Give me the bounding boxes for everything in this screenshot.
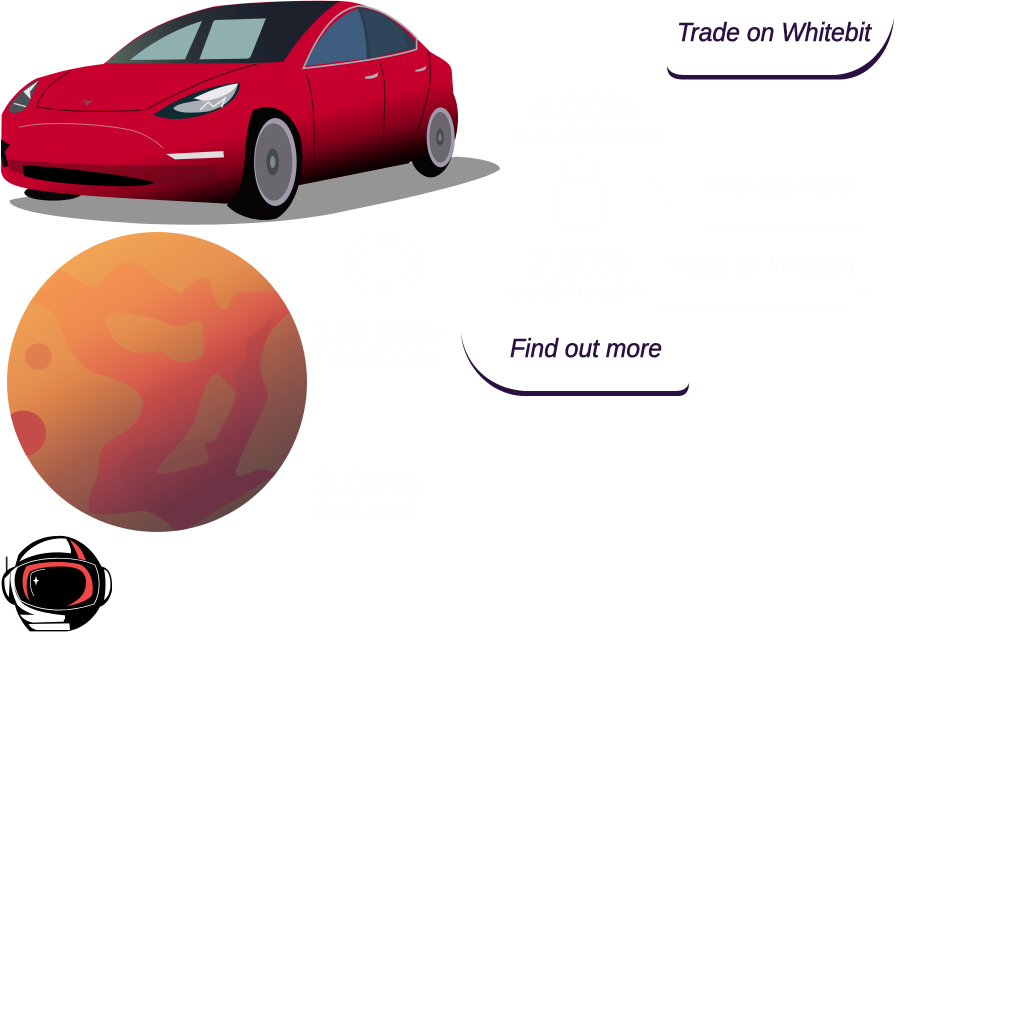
button: trade on whitebit [667, 17, 894, 80]
stat: go to holders: 2.00% [315, 464, 420, 506]
button underline swoosh [667, 18, 894, 80]
car shadow [9, 157, 500, 225]
left ear cap [4, 572, 11, 598]
hood emblem [82, 101, 94, 106]
ghost button: trade on whitebit [653, 250, 870, 308]
door handles [365, 66, 426, 79]
planet surface contours [28, 262, 290, 533]
red crest stripe [70, 540, 86, 561]
button label: Find out more [510, 333, 662, 363]
windshield glass [130, 18, 266, 60]
ghost button: find out more: Find out more [703, 170, 853, 200]
antenna [4, 557, 9, 577]
stat: current holders: CURRENT HOLDERS [328, 354, 440, 370]
button label: Trade on Whitebit [677, 17, 873, 47]
helmet shell [2, 536, 112, 631]
ghost button: trade on whitebit: Trade on Whitebit [667, 250, 858, 280]
windshield frame [107, 1, 340, 63]
car illustration [1, 1, 500, 225]
right headlight [153, 82, 240, 119]
side windows [303, 6, 417, 68]
fog light strip [166, 151, 224, 159]
far front tyre [24, 185, 82, 201]
large crater [10, 410, 46, 456]
planet [1, 232, 307, 533]
stat: locked to liquidity [510, 242, 646, 301]
faint white content layer [313, 87, 870, 521]
lower bumper shade [8, 159, 218, 185]
bumper crease [19, 124, 163, 148]
button underline swoosh [461, 333, 689, 396]
white collar band [10, 566, 65, 619]
stat: locked to liquidity: LOCKED TO LIQUIDITY [510, 284, 646, 301]
left headlight [9, 80, 39, 113]
stat: current holders: 370,000+ [313, 314, 449, 355]
neck ring upper [20, 615, 64, 623]
front wheel [227, 107, 302, 220]
stat: locked to liquidity: 2.00% [528, 242, 631, 284]
left air intake [1, 139, 10, 167]
icon: padlock outline [553, 153, 606, 225]
lower grille [23, 165, 155, 186]
stat: tax on transactions [510, 87, 662, 148]
button: find out more [461, 333, 689, 396]
visor inner highlight [30, 569, 45, 596]
inner dark band [246, 313, 276, 354]
visor sparkle [33, 576, 39, 586]
rear tyre [407, 97, 455, 177]
stat: tax on transactions: 4.00% [531, 87, 639, 131]
astronaut helmet icon [2, 536, 112, 631]
icon: ring outline [347, 233, 421, 295]
ghost button: find out more [653, 170, 870, 227]
small crater [25, 343, 52, 370]
stat: tax on transactions: TAX ON TRANSACTIONS [510, 131, 662, 148]
planet sphere [7, 232, 307, 532]
visor outline [14, 558, 99, 610]
car body [1, 1, 458, 204]
white dome [19, 538, 71, 562]
stat: current holders [313, 314, 449, 370]
rear rim [427, 107, 455, 167]
neck ring lower [29, 623, 70, 630]
body panel lines [37, 52, 431, 163]
stat: go to holders: GO TO HOLDERS [315, 505, 417, 521]
visor red reflection [23, 562, 93, 606]
right ear cap [104, 569, 110, 600]
